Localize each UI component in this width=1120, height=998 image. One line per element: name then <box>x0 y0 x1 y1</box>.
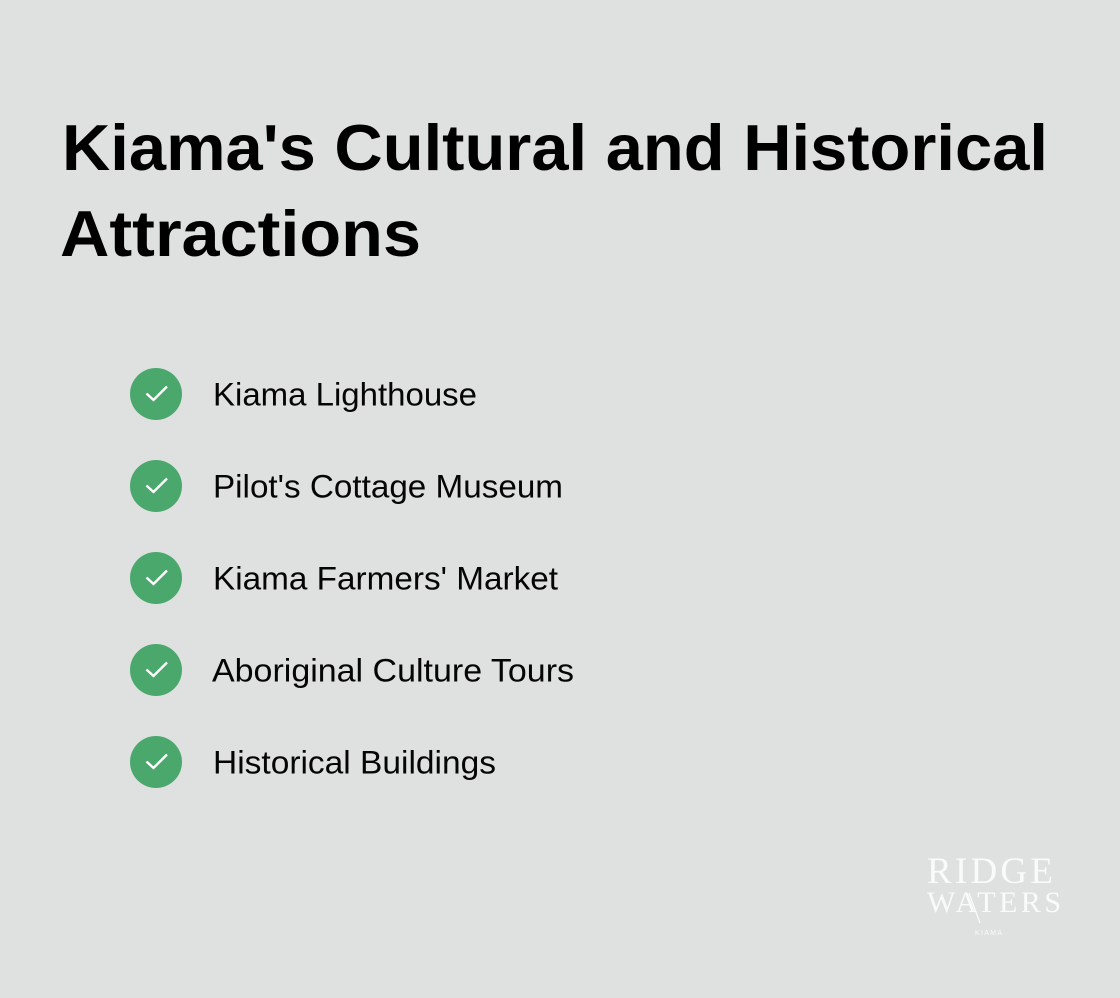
item: Kiama Farmers' Market <box>130 552 558 604</box>
title: Kiama's Cultural and Historical <box>62 111 1048 184</box>
item: Kiama Lighthouse: Kiama Lighthouse <box>213 376 477 412</box>
checklist <box>130 368 574 788</box>
title: Attractions <box>60 197 421 270</box>
item: Pilot's Cottage Museum: Pilot's Cottage Museum <box>213 468 563 504</box>
item: Kiama Farmers' Market: Kiama Farmers' Market <box>213 560 558 596</box>
logo: Ridge Waters Kiama: KIAMA <box>975 930 1002 937</box>
logo: Ridge Waters Kiama: RIDGE <box>927 851 1053 892</box>
title <box>60 111 1048 270</box>
logo: Ridge Waters Kiama: WATERS <box>927 886 1061 919</box>
item: Aboriginal Culture Tours: Aboriginal Culture Tours <box>212 652 574 688</box>
item: Pilot's Cottage Museum <box>130 460 563 512</box>
item: Kiama Lighthouse <box>130 368 477 420</box>
logo: Ridge Waters Kiama <box>927 851 1061 937</box>
item: Aboriginal Culture Tours <box>130 644 574 696</box>
item: Historical Buildings: Historical Buildings <box>213 744 496 780</box>
item: Historical Buildings <box>130 736 496 788</box>
